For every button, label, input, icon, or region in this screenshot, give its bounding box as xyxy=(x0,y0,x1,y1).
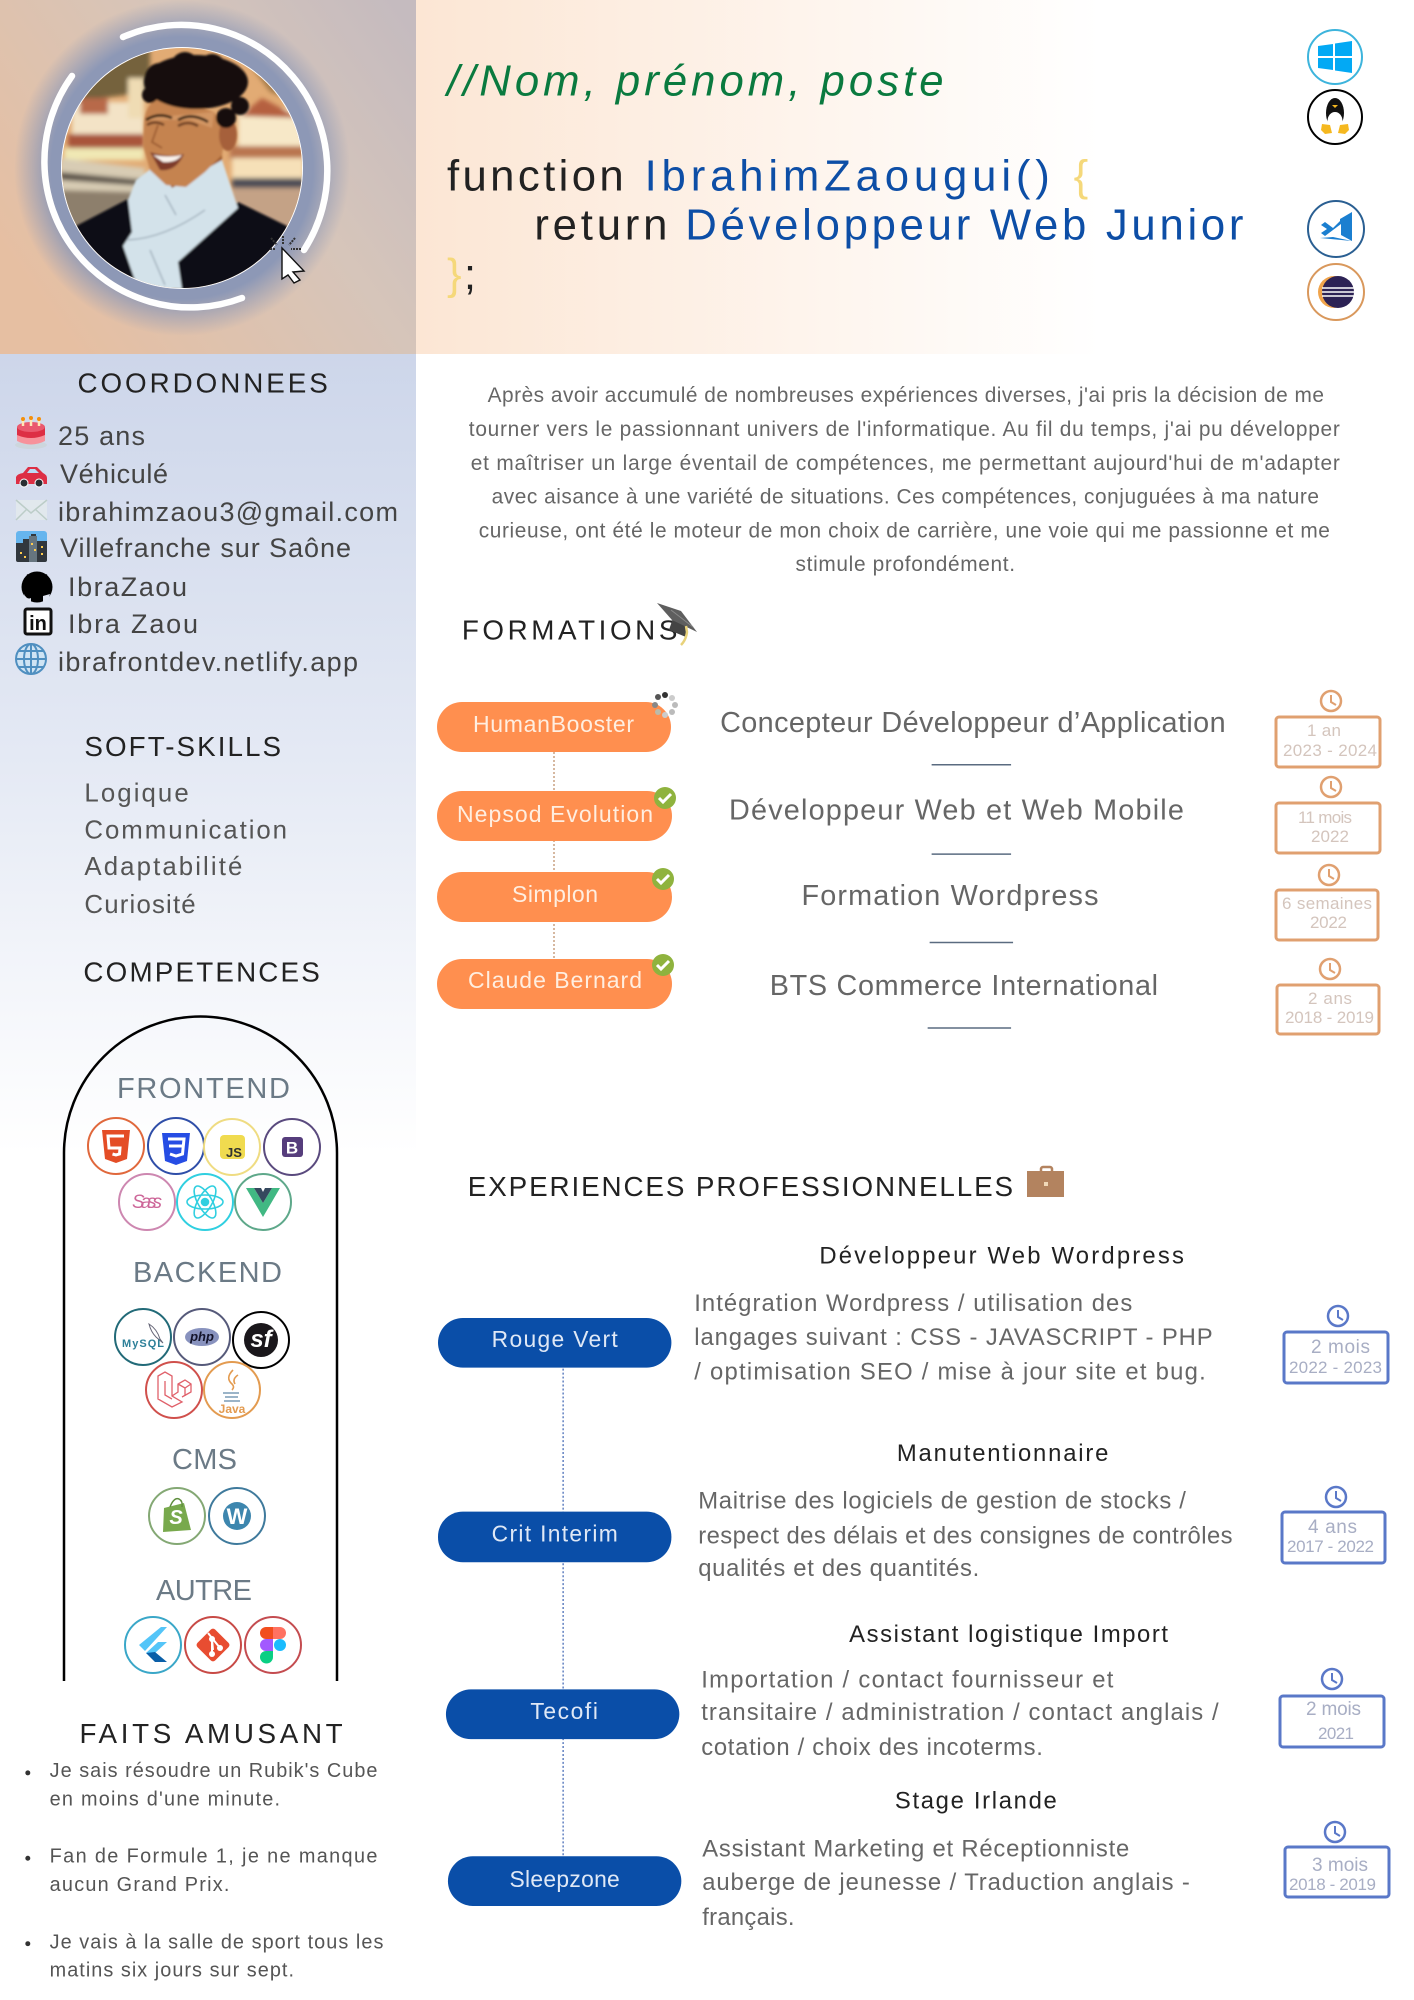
icon: globe xyxy=(16,644,46,674)
icon: graduation cap xyxy=(657,603,697,645)
icon: react xyxy=(177,1174,233,1230)
function line: { xyxy=(1074,152,1088,201)
icon: php: php xyxy=(189,1329,214,1344)
function line: function xyxy=(447,152,624,201)
heading: cms: CMS xyxy=(172,1444,237,1476)
icon: git xyxy=(185,1617,241,1673)
closing brace: ; xyxy=(464,250,476,299)
formation titles: BTS Commerce International xyxy=(770,970,1158,1002)
experience: rouge vert: Intégration Wordpress / utilisation des xyxy=(694,1290,1132,1317)
text: github: IbraZaou xyxy=(68,572,187,602)
pill: sleepzone xyxy=(448,1856,681,1906)
icon: shopify: S xyxy=(169,1507,183,1529)
icon: wordpress: W xyxy=(227,1504,248,1529)
icon: bootstrap: B xyxy=(286,1138,298,1158)
icon: check xyxy=(652,868,674,890)
experience: rouge vert: langages suivant : CSS - JAVASCRIPT - PHP xyxy=(694,1324,1213,1351)
icon: eclipse xyxy=(1308,264,1364,320)
icon: vue xyxy=(235,1174,291,1230)
icon: city xyxy=(16,531,47,562)
heading: frontend: FRONTEND xyxy=(117,1073,290,1105)
icon: linkedin xyxy=(25,609,51,635)
experience: sleepzone: Stage Irlande xyxy=(895,1788,1057,1815)
pill: sleepzone: Sleepzone xyxy=(510,1866,620,1892)
icon: linkedin: in xyxy=(29,613,47,635)
experience: tecofi xyxy=(701,1621,1219,1761)
icon: java xyxy=(204,1362,260,1418)
icon: linux xyxy=(1308,90,1362,144)
experience: crit interim: qualités et des quantités. xyxy=(698,1555,979,1582)
duration: 2 mois 2022 xyxy=(1284,1306,1388,1383)
duration: 2 ans xyxy=(1277,959,1379,1034)
pill: tecofi xyxy=(446,1689,679,1739)
pill: humanbooster xyxy=(437,702,671,752)
text block: introduction: curieuse, ont été le moteur de mon choix de carrière, une voie qui me passionne et me xyxy=(479,519,1330,542)
duration: 3 mois: 2018 - 2019 xyxy=(1289,1875,1376,1894)
duration: 2 ans: 2018 - 2019 xyxy=(1285,1008,1374,1027)
heading: faits amusant: FAITS AMUSANT xyxy=(79,1718,343,1749)
pill: rouge vert xyxy=(438,1318,671,1368)
soft skills list: Logique xyxy=(84,780,189,808)
text block: introduction xyxy=(469,384,1340,576)
text block: introduction: Après avoir accumulé de nombreuses expériences diverses, j'ai pris la décision de me xyxy=(488,384,1324,407)
icon: windows xyxy=(1308,30,1362,84)
bullet list: Je sais résoudre un Rubik's Cube xyxy=(50,1760,377,1782)
function line xyxy=(447,152,1088,201)
pill: rouge vert: Rouge Vert xyxy=(492,1326,618,1352)
return line: return xyxy=(534,200,667,249)
experience: rouge vert xyxy=(694,1242,1213,1386)
experience: sleepzone xyxy=(702,1788,1190,1931)
experience: tecofi: transitaire / administration / contact anglais / xyxy=(701,1699,1219,1726)
bullet list: Fan de Formule 1, je ne manque xyxy=(50,1845,377,1867)
pill: claude bernard: Claude Bernard xyxy=(468,967,642,993)
text: linkedin: Ibra Zaou xyxy=(68,609,198,639)
icon: figma xyxy=(245,1617,301,1673)
duration: 1 an xyxy=(1276,691,1380,767)
icon: java: Java xyxy=(219,1402,246,1416)
duration: 3 mois: 3 mois xyxy=(1312,1855,1368,1876)
bullet list: en moins d'une minute. xyxy=(50,1789,280,1811)
icon: css3 xyxy=(148,1118,204,1174)
icon: php xyxy=(174,1309,230,1365)
formation titles: Développeur Web et Web Mobile xyxy=(729,794,1184,826)
icon: flutter xyxy=(125,1617,181,1673)
experience: tecofi: Importation / contact fournisseur et xyxy=(701,1666,1114,1693)
duration: 11 mois: 2022 xyxy=(1311,827,1349,846)
heading: experiences: EXPERIENCES PROFESSIONNELLES xyxy=(468,1171,1013,1202)
icon: cake xyxy=(15,416,47,449)
experience: crit interim: respect des délais et des consignes de contrôles xyxy=(698,1522,1233,1549)
icon: sass xyxy=(119,1174,175,1230)
soft skills list: Communication xyxy=(84,816,287,844)
duration: 4 ans xyxy=(1282,1487,1385,1563)
icon: symfony: sf xyxy=(250,1326,274,1353)
experience: crit interim xyxy=(698,1440,1233,1582)
experience: crit interim: Manutentionnaire xyxy=(897,1440,1108,1467)
formation titles xyxy=(720,707,1226,1028)
duration: 2 mois 2021 xyxy=(1280,1669,1384,1747)
function line: IbrahimZaougui() xyxy=(645,152,1050,201)
soft skills list xyxy=(84,780,287,919)
sidebar background xyxy=(0,354,416,1154)
duration: 4 ans: 2017 - 2022 xyxy=(1287,1537,1374,1556)
icon: vs code xyxy=(1308,201,1364,257)
text block: introduction: et maîtriser un large éventail de compétences, me permettant aujourd'hui de m'adapter xyxy=(471,452,1340,475)
icon: github xyxy=(22,572,52,603)
bullet list: aucun Grand Prix. xyxy=(50,1874,229,1896)
text block: introduction: tourner vers le passionnant univers de l'informatique. Au fil du temps, j'ai pu développer xyxy=(469,418,1340,441)
duration: 2 ans: 2 ans xyxy=(1308,989,1352,1008)
experience: crit interim: Maitrise des logiciels de gestion de stocks / xyxy=(698,1488,1186,1515)
duration: 11 mois: 11 mois xyxy=(1298,808,1352,827)
icon: javascript: JS xyxy=(226,1145,242,1160)
timeline: formations connector xyxy=(553,752,555,959)
heading: soft skills: SOFT-SKILLS xyxy=(84,731,281,762)
experience: sleepzone: auberge de jeunesse / Traduction anglais - xyxy=(702,1869,1190,1896)
pill: simplon xyxy=(437,872,672,922)
profile photo with rings xyxy=(14,0,350,336)
experience section xyxy=(438,1242,1233,1931)
icon: javascript xyxy=(204,1119,260,1175)
icon: check xyxy=(654,787,676,809)
text: email: ibrahimzaou3@gmail.com xyxy=(58,497,398,527)
return line: Développeur Web Junior xyxy=(685,200,1243,249)
icon: check xyxy=(652,954,674,976)
experience: sleepzone: français. xyxy=(702,1904,795,1931)
duration: 2 mois 2021: 2021 xyxy=(1318,1724,1354,1743)
pill: humanbooster: HumanBooster xyxy=(473,711,634,737)
heading: backend: BACKEND xyxy=(133,1257,282,1289)
text: website: ibrafrontdev.netlify.app xyxy=(58,647,358,677)
bullet list xyxy=(25,1760,383,1981)
duration: 3 mois xyxy=(1285,1822,1389,1897)
closing brace xyxy=(447,250,476,299)
experience: rouge vert: Développeur Web Wordpress xyxy=(819,1242,1184,1269)
heading: autre: AUTRE xyxy=(156,1575,252,1607)
duration: 2 mois 2022: 2 mois xyxy=(1311,1337,1370,1358)
soft skills list: Curiosité xyxy=(84,891,196,919)
experience: sleepzone: Assistant Marketing et Réceptionniste xyxy=(702,1835,1129,1862)
duration: 1 an: 2023 - 2024 xyxy=(1283,741,1377,760)
icon: spinner xyxy=(652,692,678,718)
text block: introduction: avec aisance à une variété de situations. Ces compétences, conjuguées à ma nature xyxy=(492,486,1319,509)
formation titles: Concepteur Développeur d’Application xyxy=(720,707,1226,739)
icon: html5 xyxy=(88,1118,144,1174)
icon: briefcase xyxy=(1027,1167,1064,1197)
experience: tecofi: cotation / choix des incoterms. xyxy=(701,1734,1043,1761)
heading: coordonnees: COORDONNEES xyxy=(77,367,328,398)
duration: 6 semaines: 6 semaines xyxy=(1282,894,1372,913)
duration: 11 mois xyxy=(1276,777,1380,853)
pill: crit interim: Crit Interim xyxy=(492,1520,618,1546)
timeline: experience connector xyxy=(562,1369,564,1857)
icon: car xyxy=(16,467,47,487)
text block: introduction: stimule profondément. xyxy=(796,553,1015,576)
icon: sass: Sass xyxy=(132,1192,162,1213)
panel: skills arch xyxy=(64,1016,337,1681)
text: city: Villefranche sur Saône xyxy=(60,533,351,563)
comment line: //Nom, prénom, poste xyxy=(444,56,944,105)
icon: envelope xyxy=(16,500,47,520)
icon: laravel xyxy=(146,1362,202,1418)
formation titles: Formation Wordpress xyxy=(802,880,1098,912)
icon: mouse cursor xyxy=(269,236,304,283)
duration: 4 ans: 4 ans xyxy=(1308,1517,1357,1538)
icon: symfony xyxy=(233,1312,289,1368)
title block xyxy=(444,56,1243,299)
icon: shopify xyxy=(149,1488,205,1544)
text: vehicle: Véhiculé xyxy=(60,459,168,489)
text: age: 25 ans xyxy=(58,421,145,451)
pill: nepsod evolution xyxy=(437,791,672,841)
heading: competences: COMPETENCES xyxy=(83,956,320,987)
panel: faits amusant xyxy=(25,1718,383,1981)
header background right xyxy=(416,0,1100,354)
experience: tecofi: Assistant logistique Import xyxy=(849,1621,1168,1648)
icon: wordpress xyxy=(209,1488,265,1544)
pill: nepsod evolution: Nepsod Evolution xyxy=(457,801,653,827)
duration: 2 mois 2022: 2022 - 2023 xyxy=(1289,1358,1382,1377)
header background left xyxy=(0,0,416,354)
duration: 6 semaines xyxy=(1276,865,1378,940)
heading: formations: FORMATIONS xyxy=(462,615,677,646)
pill: tecofi: Tecofi xyxy=(530,1698,598,1724)
pill: simplon: Simplon xyxy=(512,881,598,907)
icon: mysql: MySQL xyxy=(122,1338,164,1350)
experience: rouge vert: / optimisation SEO / mise à jour site et bug. xyxy=(694,1359,1206,1386)
closing brace: } xyxy=(447,250,462,299)
pill: crit interim xyxy=(438,1512,671,1562)
icon: mysql xyxy=(115,1309,171,1365)
bullet list: matins six jours sur sept. xyxy=(50,1959,294,1981)
duration: 6 semaines: 2022 xyxy=(1310,913,1347,932)
icon: bootstrap xyxy=(264,1119,320,1175)
soft skills list: Adaptabilité xyxy=(84,853,242,881)
duration: 2 mois 2021: 2 mois xyxy=(1306,1699,1361,1720)
bullet list: Je vais à la salle de sport tous les xyxy=(50,1932,383,1954)
panel: contact list xyxy=(15,416,398,677)
pill: claude bernard xyxy=(437,959,672,1009)
duration: 1 an: 1 an xyxy=(1307,721,1341,740)
